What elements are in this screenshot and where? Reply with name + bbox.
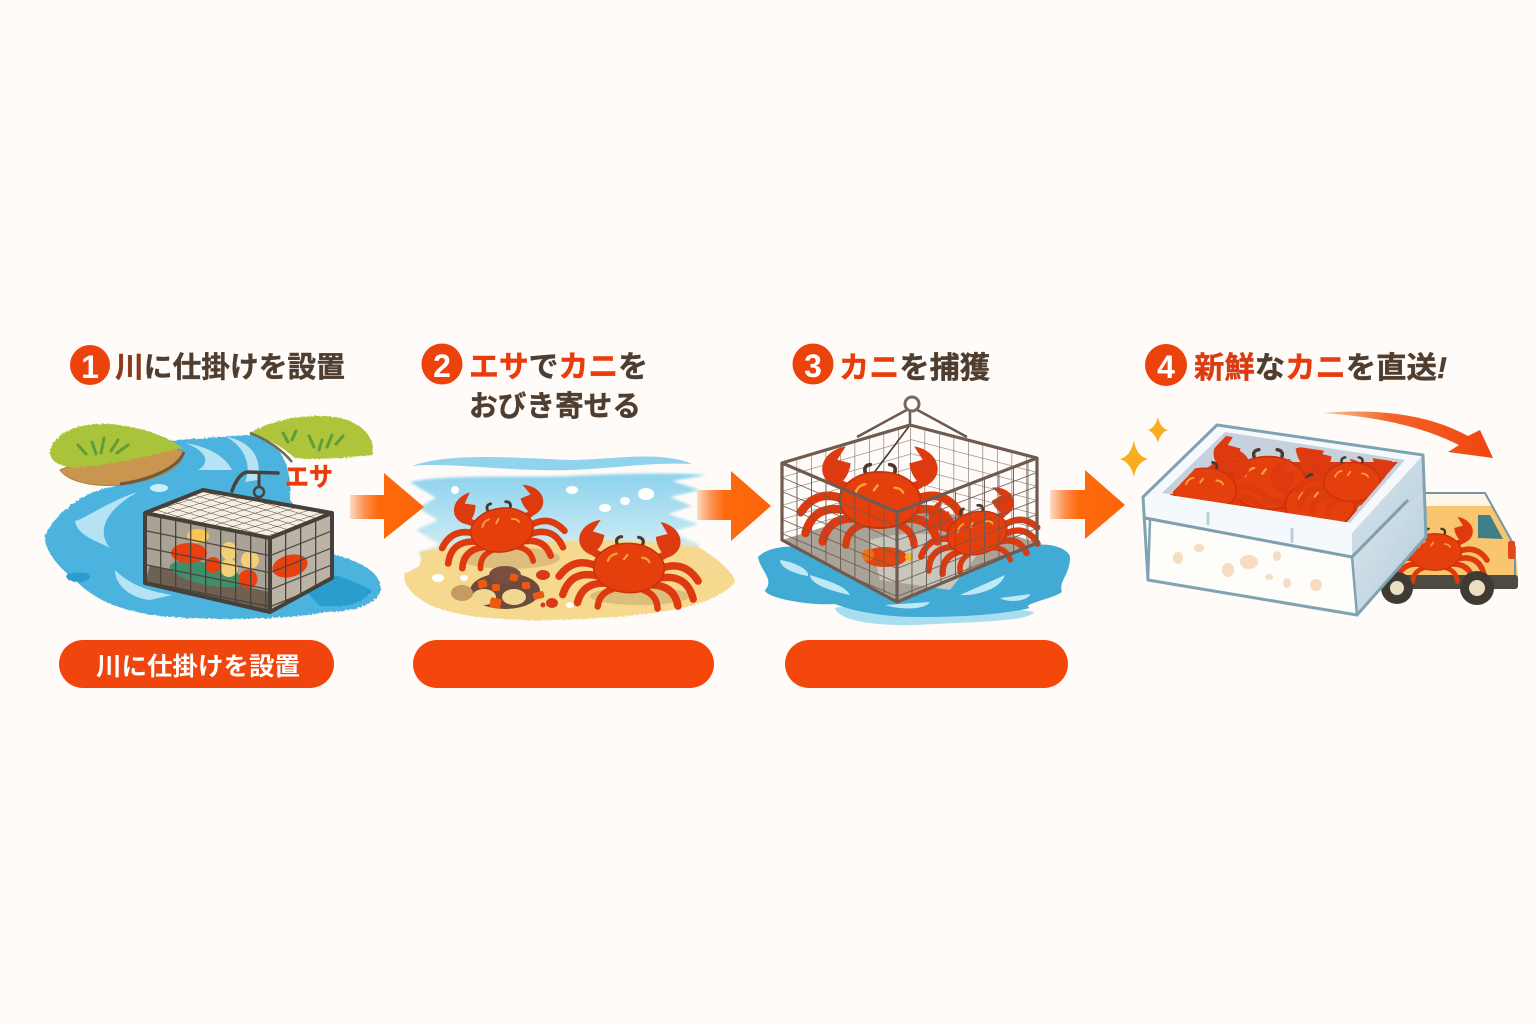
heading: step 1: 1 (81, 349, 99, 385)
heading: step 4 (1145, 344, 1447, 386)
heading: step 2 (422, 344, 648, 423)
heading: step 3 (792, 344, 990, 385)
icon: trap cage with bait (145, 472, 332, 612)
panel: step 1 set the trap in the river (45, 345, 381, 688)
pill: step 1 caption: 川に仕掛けを設置 (96, 653, 300, 681)
pill: step 2 caption (blank) (413, 640, 714, 688)
heading: step 4: 4 (1157, 349, 1175, 385)
icon: small sparkle (1148, 417, 1168, 443)
icon: crab cage with crabs (782, 397, 1043, 602)
illustration: sandy beach (404, 540, 735, 620)
illustration: water puddle (758, 545, 1070, 625)
illustration: left river bank (50, 424, 184, 485)
icon: crab right (558, 519, 700, 610)
panel: step 3 catch crabs (758, 344, 1070, 688)
heading: step 3: 3 (804, 348, 822, 384)
icon: bait pile (451, 566, 558, 609)
label: bait: エサ (285, 462, 333, 492)
icon: sand pebbles (432, 574, 574, 608)
icon: large sparkle (1120, 440, 1148, 477)
arrow: step 1 to 2 (350, 473, 424, 539)
icon: crab shadow left (460, 547, 560, 569)
panel: step 2 lure crabs with bait (404, 344, 735, 688)
heading: step 2: エサでカニを (469, 351, 648, 384)
heading: step 1 (70, 345, 345, 385)
arrow: step 3 to 4 (1050, 470, 1125, 539)
heading: step 3: カニを捕獲 (839, 352, 990, 385)
icon: foam box with crabs (1143, 425, 1426, 615)
heading: step 2: 2 (433, 348, 451, 384)
pill: step 3 caption (blank) (785, 640, 1068, 688)
panel: step 4 ship fresh crabs direct (1120, 344, 1518, 615)
arrow: curved delivery (1322, 411, 1493, 458)
icon: crab left (435, 480, 568, 573)
pill: step 1 caption (59, 640, 334, 688)
illustration: river (45, 434, 381, 619)
illustration: shallow sea (410, 457, 706, 570)
arrow: step 2 to 3 (697, 471, 771, 541)
icon: delivery truck (1380, 493, 1518, 605)
illustration: right river bank (250, 416, 373, 462)
heading: step 2: おびき寄せる (469, 390, 641, 423)
icon: crab shadow right (590, 587, 690, 605)
heading: step 4: 新鮮なカニを直送! (1194, 352, 1447, 385)
heading: step 1: 川に仕掛けを設置 (115, 351, 345, 384)
